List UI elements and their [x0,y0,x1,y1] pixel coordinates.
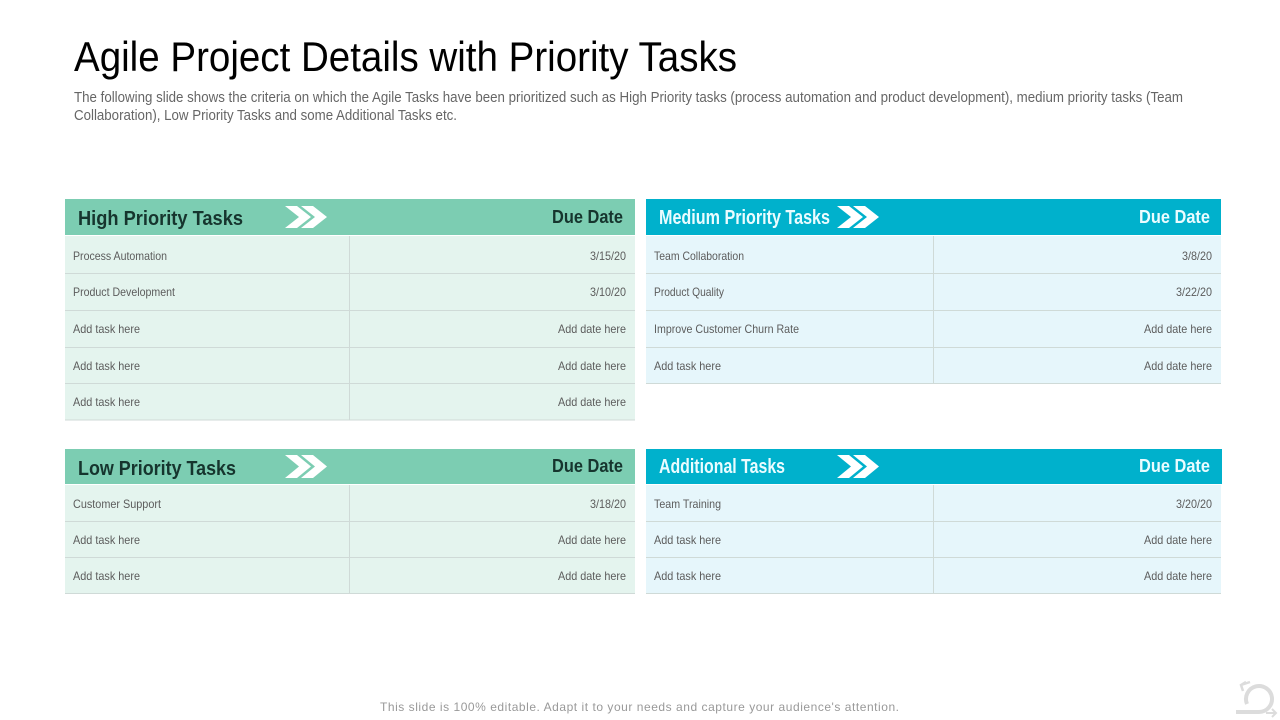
low priority rows [73,497,626,583]
low priority rows: 3/18/20 [590,497,626,511]
high priority rows: Add task here [73,395,140,409]
high priority rows: Add date here [558,359,626,373]
low priority rows: Add task here [73,533,140,547]
additional tasks rows: Add date here [1144,569,1212,583]
panel: low priority tasks [65,449,635,594]
footer note: This slide is 100% editable. Adapt it to your needs and capture your audience's attention. [380,700,899,714]
title: Agile Project Details with Priority Tasks [74,33,737,80]
icon: double chevron [837,206,879,228]
additional tasks rows [654,497,1212,583]
icon: double chevron [837,455,879,478]
header: high priority tasks [65,199,635,235]
header: medium priority tasks [646,199,1221,235]
high priority rows: 3/10/20 [590,285,626,299]
header: additional tasks [646,449,1222,484]
high priority rows: Add task here [73,359,140,373]
medium priority rows: 3/22/20 [1176,285,1212,299]
medium priority rows: Add date here [1144,359,1212,373]
high priority rows: Add date here [558,395,626,409]
subtitle text block: The following slide shows the criteria on which the Agile Tasks have been prioritized such as High Priority tasks (process automation and product development), medium priority tasks (Team [74,90,1183,106]
header: additional tasks: Additional Tasks [659,456,785,478]
high priority rows [73,249,626,409]
high priority rows: Product Development [73,285,176,299]
medium priority rows: Team Collaboration [654,249,744,263]
additional tasks rows: 3/20/20 [1176,497,1212,511]
subtitle text block [74,90,1183,124]
high priority rows: 3/15/20 [590,249,626,263]
high priority rows: Add date here [558,322,626,336]
high priority rows: Add task here [73,322,140,336]
medium priority rows: Improve Customer Churn Rate [654,322,799,336]
header: low priority tasks: Low Priority Tasks [78,458,236,480]
header: additional tasks: Due Date [1139,456,1210,476]
medium priority rows: Add date here [1144,322,1212,336]
additional tasks rows: Add task here [654,569,721,583]
panel: medium priority tasks [646,199,1221,384]
panel: additional tasks [646,449,1222,594]
panel: high priority tasks [65,199,635,420]
icon: agile loop logo [1236,682,1276,717]
header: medium priority tasks: Medium Priority Tasks [659,207,830,229]
medium priority rows: Add task here [654,359,721,373]
additional tasks rows: Add date here [1144,533,1212,547]
subtitle text block: Collaboration), Low Priority Tasks and some Additional Tasks etc. [74,108,457,124]
header: low priority tasks: Due Date [552,456,623,476]
high priority rows: Process Automation [73,249,167,263]
header: medium priority tasks: Due Date [1139,207,1210,227]
icon: double chevron [285,455,327,478]
low priority rows: Customer Support [73,497,162,511]
low priority rows: Add date here [558,569,626,583]
additional tasks rows: Team Training [654,497,721,511]
header: low priority tasks [65,449,635,484]
icon: double chevron [285,206,327,228]
low priority rows: Add date here [558,533,626,547]
medium priority rows: 3/8/20 [1182,249,1212,263]
medium priority rows: Product Quality [654,285,724,299]
medium priority rows [654,249,1212,373]
additional tasks rows: Add task here [654,533,721,547]
header: high priority tasks: High Priority Tasks [78,208,243,230]
header: high priority tasks: Due Date [552,207,623,227]
low priority rows: Add task here [73,569,140,583]
